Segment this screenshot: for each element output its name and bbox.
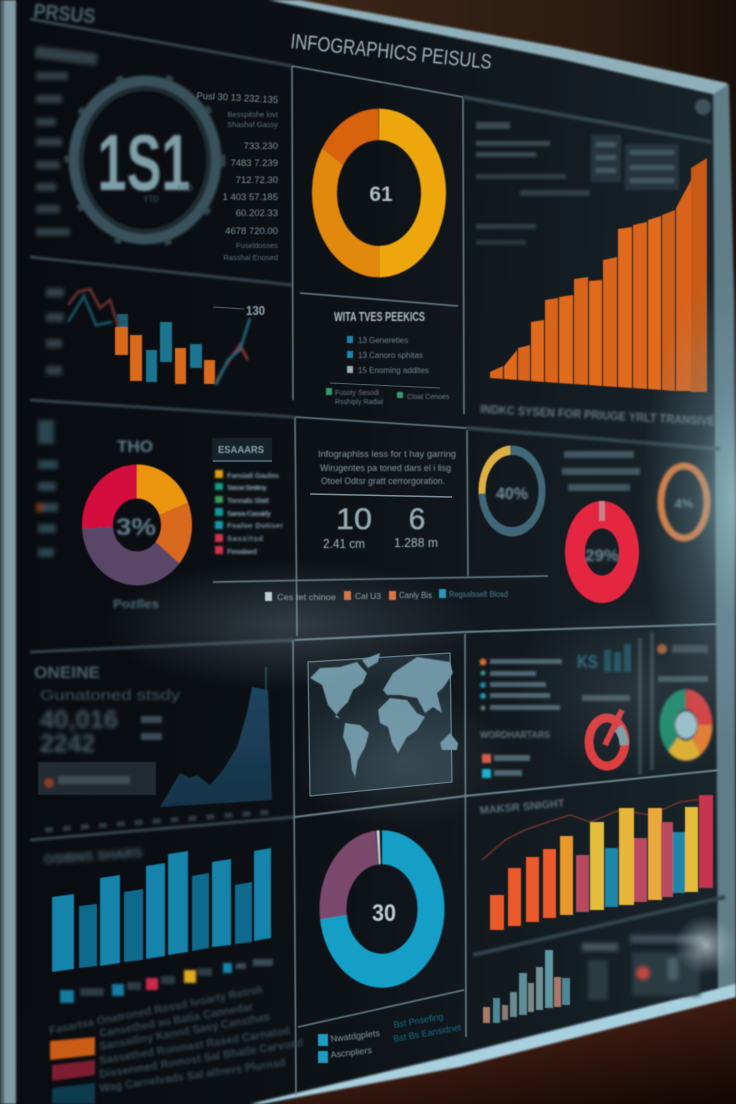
list heading: WITA TVES PEEKICS: [334, 309, 425, 324]
ring notes: [562, 451, 640, 491]
left divider lines: [30, 19, 295, 840]
list rows: 15 Enoming addites: [358, 366, 429, 375]
legend heading: ESAAARS: [218, 445, 264, 456]
pie: [667, 699, 705, 751]
panel: blurred footer widgets: [582, 935, 704, 1000]
notes swatches: [50, 1037, 95, 1104]
legend heading: [212, 438, 272, 462]
gauge readouts: Pusl 30 13 232.135: [196, 91, 278, 106]
notes rows: Wag Carnelvads Sal alfners Plurnsd: [99, 1057, 286, 1095]
panel small figures: [141, 716, 162, 740]
donut value: 3%: [116, 514, 156, 541]
trend lines: [68, 289, 250, 385]
donut value: 61: [369, 183, 393, 206]
stat units: [323, 535, 438, 551]
stat values: 6: [409, 503, 425, 536]
bars: [490, 158, 707, 392]
gauge readouts: [196, 91, 279, 262]
paragraph: Infographlss less for t hay garring: [318, 449, 456, 460]
gauge readouts: Besspitshe lovt: [228, 110, 279, 119]
gauge ring: [67, 74, 223, 246]
donut legend: [318, 1011, 462, 1063]
ring: 29 percent: [575, 501, 629, 589]
stat units: 1.288 m: [394, 535, 438, 550]
ring: right: [661, 466, 707, 538]
panel: world map: [308, 653, 458, 796]
gauge small labels: [143, 184, 193, 204]
axis ticks: [45, 812, 270, 830]
legend: [215, 470, 283, 556]
legend strip: [265, 589, 508, 602]
gauge readouts: 1 403 57.185: [223, 192, 278, 203]
legend strip: Regsalsselt Blosd: [449, 589, 508, 599]
paragraph: Wirugentes pa toned dars el i lisg: [320, 463, 451, 474]
legend: Tonnals Slatt: [227, 496, 270, 505]
legend: Feoalaed: [227, 547, 257, 556]
panel: lists and gauges: [480, 644, 708, 778]
side labels: [36, 420, 58, 557]
panel: segmented donut: [36, 420, 283, 611]
gauge readouts: 733.230: [244, 141, 278, 152]
panel: mixed bar chart: [479, 795, 713, 930]
donut caption: Pozlles: [113, 597, 159, 611]
title: INFOGRAPHICS PEISULS: [289, 30, 493, 74]
list legend: Rsshiply Radial: [335, 399, 384, 406]
gauge: [589, 710, 625, 766]
panel badge: [38, 762, 156, 795]
gauge small labels: YTD: [143, 195, 159, 204]
panel: small bar chart: [483, 950, 570, 1023]
sidebar labels: [35, 46, 98, 236]
list: [480, 658, 562, 710]
gauge readouts: Shashaf Gassy: [227, 120, 278, 129]
notes rows: Cansethed au Batia Cannedar: [98, 1001, 255, 1040]
center divider lines: [213, 66, 720, 1095]
list legend: Cloat Cenoes: [407, 394, 450, 401]
line value: 130: [246, 303, 265, 318]
notes rows: Dissenmed Romost Sal Bhatle Carvoed: [99, 1037, 304, 1081]
trend line: [482, 798, 710, 860]
list legend: [326, 388, 450, 406]
legend: Sanos Cassidy: [227, 509, 272, 518]
panel: candlestick chart: [46, 288, 265, 385]
panel heading: ONEINE: [34, 663, 100, 682]
mini notes: [582, 695, 630, 701]
panel: ring metrics: [482, 450, 707, 589]
y axis labels: [46, 288, 64, 375]
line value: [213, 303, 265, 318]
paragraph: [318, 449, 456, 487]
gauge readouts: 712.72.30: [236, 175, 278, 186]
light glare: [100, 260, 736, 975]
gauge readouts: Rasshal Enosed: [223, 253, 278, 262]
panel: text and stats: [310, 449, 456, 551]
candles: [115, 314, 215, 384]
gauge readouts: 4678 720.00: [225, 226, 278, 237]
donut legend: Ascnpliers: [330, 1045, 373, 1060]
legend strip: Ces tet chinoe: [277, 592, 336, 602]
area plot: [160, 667, 272, 807]
panel figures: [40, 706, 118, 758]
right divider lines: [463, 97, 725, 955]
panel: mid list: [326, 309, 450, 406]
ring: 40 percent: 40%: [496, 484, 528, 503]
ring: right: 4%: [675, 496, 694, 511]
bar legend: [60, 959, 273, 1003]
panel: blue bar chart: [43, 845, 304, 1104]
notes rows: Sassethed Ronmast Rased Carnatod: [99, 1025, 291, 1067]
stat units: 2.41 cm: [323, 536, 365, 551]
pie heading: [657, 644, 708, 682]
panel: cyan donut: [318, 847, 462, 1063]
stat values: [336, 503, 425, 536]
gauge readouts: 60.202.33: [236, 208, 278, 219]
legend: Fansiali Gaulos: [227, 471, 279, 480]
ring: 29 percent: 29%: [585, 546, 619, 565]
donut legend: Bst Pnsefing: [393, 1011, 444, 1030]
donut value: 30: [372, 900, 396, 927]
panel figures: 2242: [40, 730, 95, 758]
legend strip: Cal U3: [355, 591, 381, 601]
notes rows: Fasartsa Onatroned Rossd Ivoarty Retrok: [48, 983, 265, 1037]
donut heading: THO: [117, 437, 153, 456]
list rows: [347, 336, 429, 375]
panel: orange donut: [324, 124, 434, 262]
map continents: [310, 653, 458, 777]
legend: Sasse Sestroy: [227, 483, 268, 492]
gauge small labels: YTD: [177, 184, 193, 193]
list rows: 13 Genereties: [358, 336, 408, 345]
corner heading: PRSUS: [33, 0, 96, 28]
chart caption: INDKC SYSEN FOR PRIUGE YRLT TRANSIVE: [480, 402, 715, 428]
list footer: WORDHARTARS: [480, 729, 550, 741]
list rows: 13 Canoro sphitas: [358, 351, 423, 360]
panel figures: 40,016: [40, 706, 118, 734]
notes rows: Sansailiny Kannd Sasy Cansthas: [98, 1011, 271, 1053]
panel: area chart: [34, 663, 272, 830]
gauge readouts: Fuseldosses: [236, 241, 278, 250]
panel subheading: Gunatoned stsdy: [40, 687, 181, 704]
footer keys: [482, 754, 530, 778]
bars: [490, 795, 713, 930]
bars: [52, 848, 271, 972]
legend: Sassitsd: [227, 534, 263, 543]
list legend: Fusoty Sesodi: [335, 390, 380, 397]
notes rows: [48, 983, 304, 1095]
legend: Foaloe Dutiser: [227, 521, 283, 530]
mini stat: KS: [577, 652, 598, 672]
mini bars: [604, 644, 631, 672]
panel: gauge: [35, 46, 279, 262]
chart heading: MAKSR SNIGHT: [479, 798, 565, 817]
chart note boxes: [591, 99, 711, 190]
gauge readouts: 7483 7.239: [230, 158, 278, 169]
gauge value: 1S1: [98, 118, 190, 207]
stat values: 10: [336, 503, 372, 536]
chart heading: OSIBNS SHARS: [43, 845, 143, 867]
donut legend: Bst Bs Eansidnet: [393, 1022, 462, 1044]
ring: 40 percent: [482, 450, 542, 532]
panel: orange bar chart: [476, 99, 715, 428]
donut legend: Nwatdgplets: [330, 1028, 381, 1044]
chart notes: [476, 122, 590, 245]
paragraph: Otoel Odtsr gratt cerrorgoration.: [321, 476, 445, 487]
legend strip: Canly Bis: [399, 590, 432, 600]
